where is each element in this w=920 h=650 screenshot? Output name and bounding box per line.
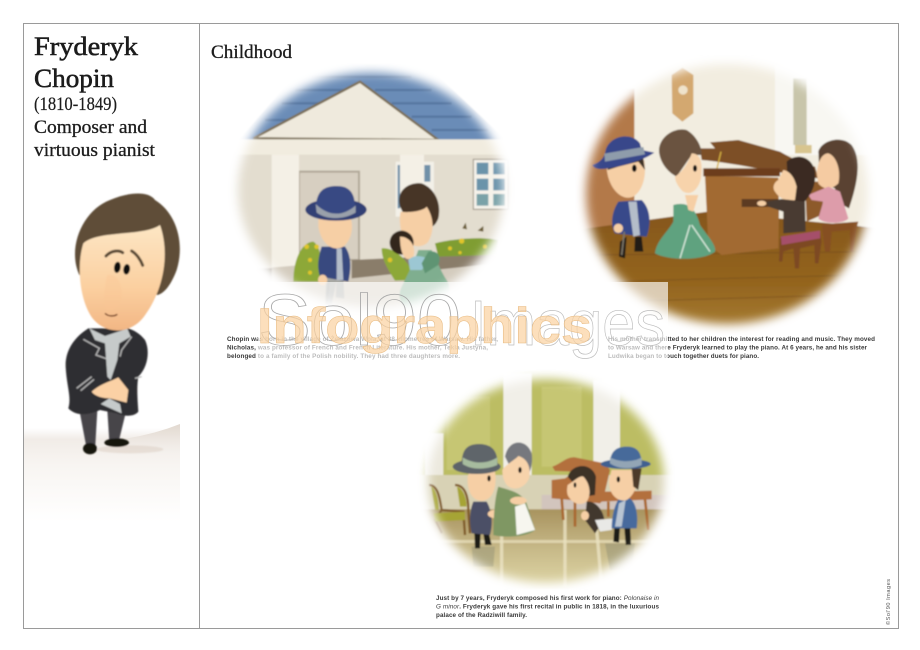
hair	[75, 193, 180, 295]
caption: first work: G minor. Fryderyk gave his first recital in public in 1818, in the luxurious	[436, 604, 659, 610]
pediment	[253, 82, 438, 140]
entablature	[235, 139, 515, 155]
piano	[552, 457, 652, 503]
floor	[575, 212, 882, 335]
title: virtuous pianist	[34, 141, 156, 161]
dado	[415, 475, 675, 510]
watermark: Infographics	[257, 298, 592, 354]
piano lid	[700, 140, 818, 178]
face	[80, 225, 165, 330]
piano body	[705, 176, 779, 255]
nose	[104, 275, 122, 310]
roof	[238, 63, 508, 142]
caption: music at home: to Warsaw and there Fryderyk learned to play the piano. At 6 years, he and his sister	[608, 344, 868, 352]
chairs	[429, 485, 470, 535]
heading: Childhood: Childhood	[211, 43, 293, 63]
credit: ©Sol'90 Images	[885, 579, 892, 625]
clock	[672, 68, 693, 122]
sky	[225, 60, 515, 140]
legs	[79, 410, 126, 445]
watermark: Images	[470, 287, 665, 359]
cravat	[89, 328, 131, 413]
caption: birth	[227, 335, 498, 360]
mother	[655, 129, 715, 259]
window right	[473, 159, 508, 209]
door	[575, 88, 634, 232]
man	[305, 186, 367, 305]
floor reflections	[472, 543, 635, 570]
illustration: recital in the palace	[415, 370, 675, 589]
caption: birth: belonged to a family of the Polish nobility. They had three daughters more.	[227, 353, 460, 360]
watermark: Sol90	[258, 281, 461, 361]
wall	[234, 154, 506, 268]
woman	[390, 183, 450, 313]
window	[775, 72, 861, 156]
stool left	[779, 238, 822, 268]
young Chopin	[567, 466, 615, 533]
title: (1810-1849)	[34, 95, 117, 115]
watermark	[257, 281, 668, 362]
caption: birth: Chopin was born in the village of Żelazowa Wola, at 38 kilometres of Warsaw. His father,	[227, 335, 498, 343]
father	[592, 136, 654, 258]
hedges	[293, 242, 322, 282]
eyes	[113, 261, 121, 273]
caption: music at home: His mother transmitted to her children the interest for reading and music. They moved	[608, 336, 875, 343]
girl left	[787, 157, 815, 207]
right man	[601, 447, 651, 545]
illustration: house scene	[234, 66, 510, 308]
title: Chopin	[34, 63, 114, 93]
eyebrows	[106, 251, 143, 265]
illustration: family at the piano	[575, 55, 882, 335]
floor shadow under Chopin	[24, 424, 180, 522]
butterflies	[462, 223, 483, 232]
wall	[420, 372, 672, 476]
stool right	[822, 222, 858, 252]
title: Fryderyk	[34, 31, 139, 61]
hand	[92, 377, 128, 403]
caption: music at home	[608, 336, 875, 360]
door	[299, 172, 359, 260]
caption: first work: Just by 7 years, Fryderyk composed his first work for piano: Polonaise in	[436, 595, 659, 602]
path	[272, 262, 471, 308]
caption: first work: palace of the Radziwill family.	[436, 612, 527, 619]
mouth	[105, 313, 117, 316]
left man	[453, 444, 506, 548]
coat	[66, 328, 148, 416]
shoes	[83, 443, 97, 454]
illustration: Chopin character	[66, 193, 180, 454]
girl right	[818, 140, 858, 208]
columns	[272, 155, 299, 285]
columns	[503, 373, 532, 477]
floor	[415, 509, 675, 589]
title	[34, 31, 156, 161]
older woman	[493, 442, 535, 537]
wall	[634, 61, 871, 228]
caption: music at home: Ludwika began to touch together duets for piano.	[608, 353, 759, 360]
caption: birth: Nicholas, was professor of French and French Literature. His mother, Tekla Justyna,	[227, 344, 488, 352]
window	[396, 162, 434, 217]
title: Composer and	[34, 118, 148, 138]
caption: first work	[436, 595, 659, 619]
